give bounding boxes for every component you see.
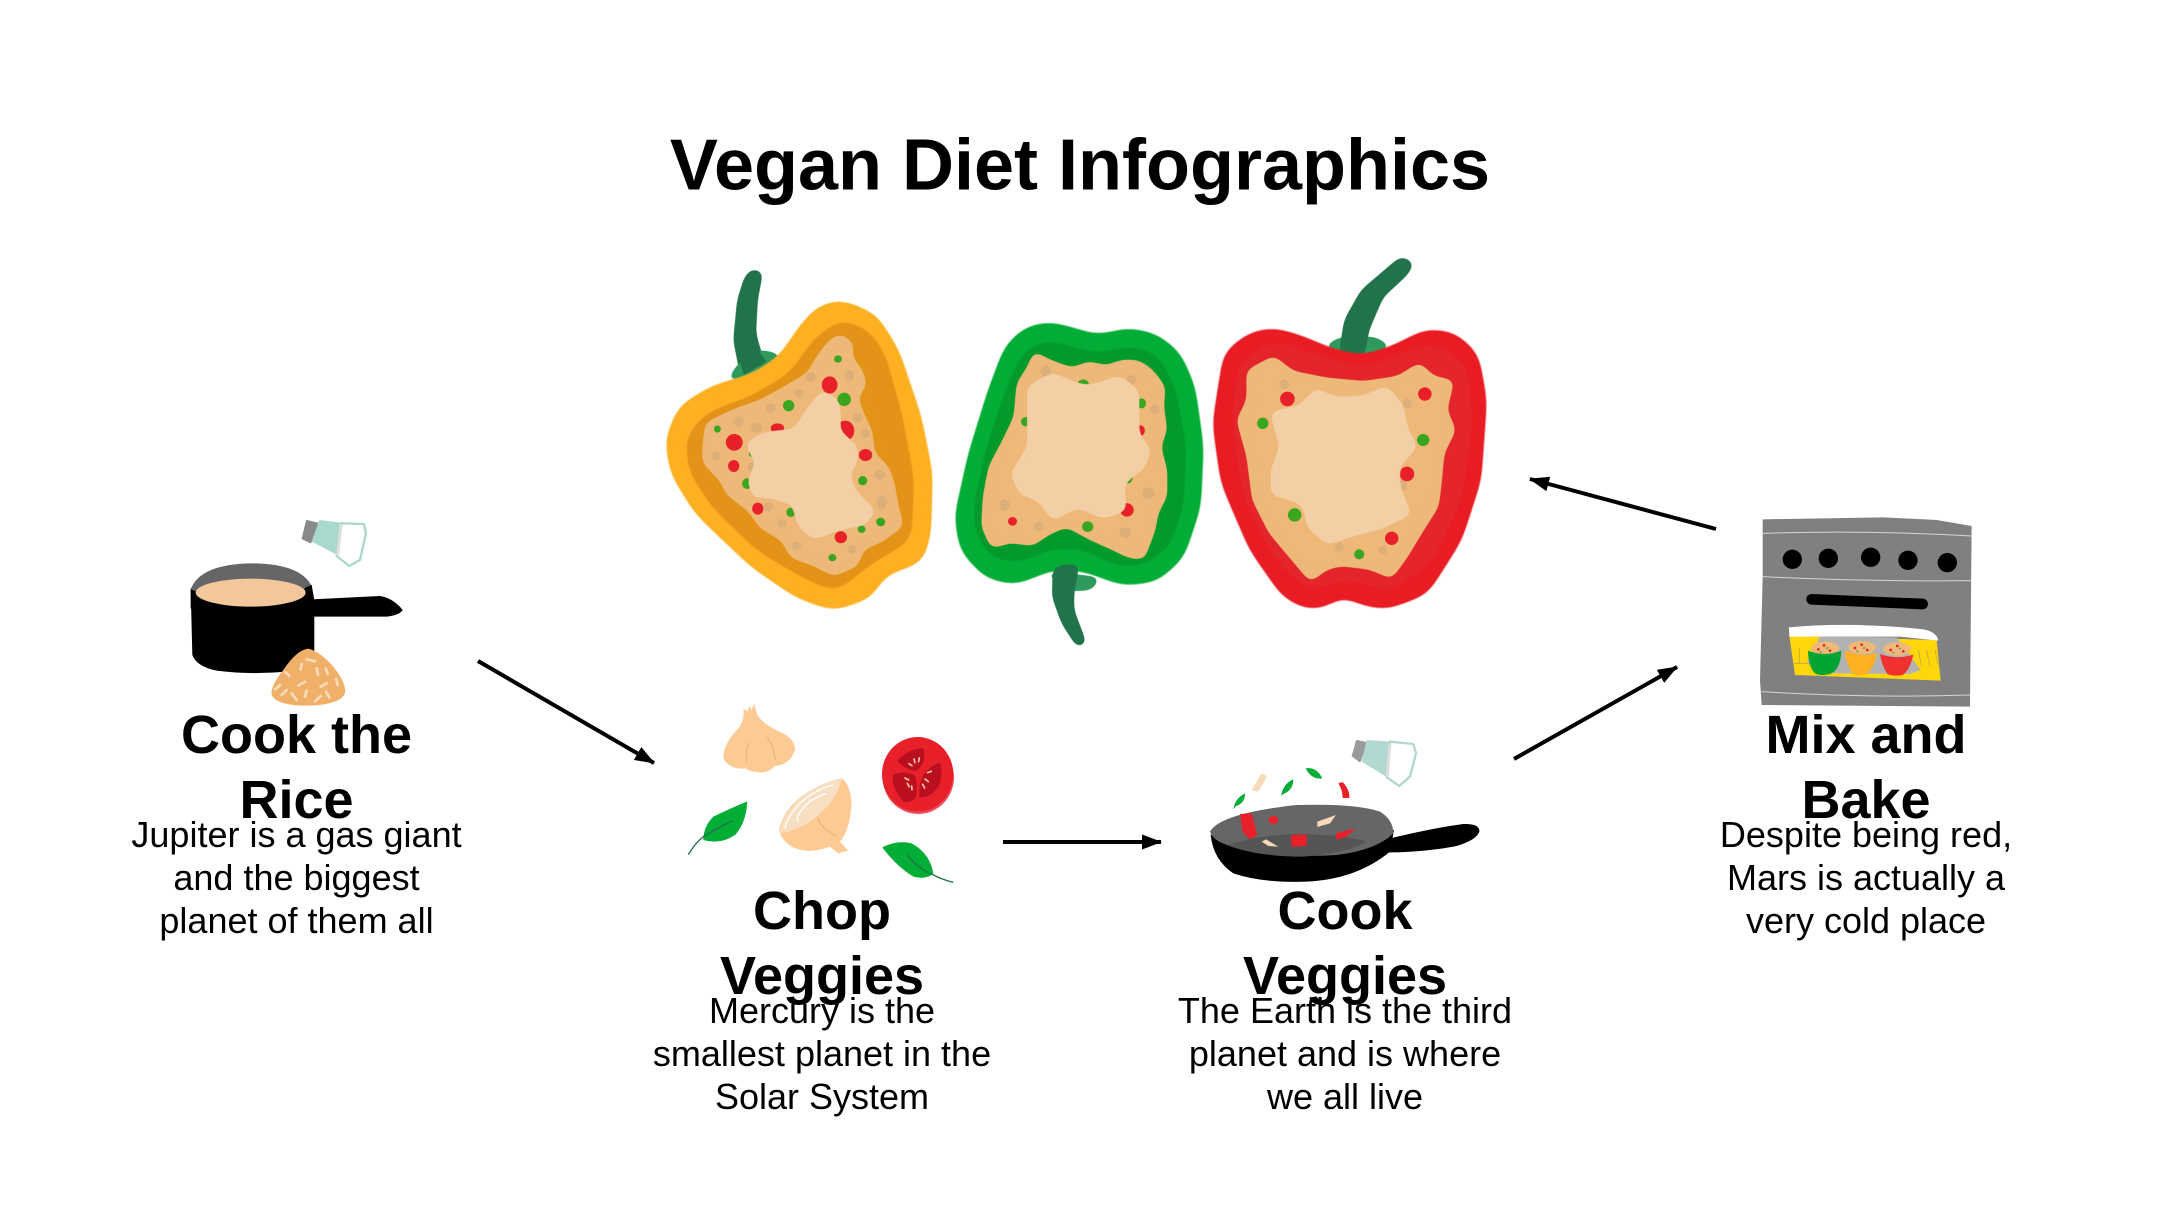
text: jupiter description: planet of them all — [159, 900, 434, 941]
icon: garlic, onion, tomato and basil — [688, 704, 954, 882]
text: mercury description: Mercury is the — [709, 990, 935, 1031]
heading: chop veggies: Chop — [753, 881, 891, 941]
heading: cook the rice: Rice — [239, 770, 354, 830]
text: mars description: very cold place — [1746, 900, 1986, 941]
icon: pot with rice and salt — [191, 520, 403, 706]
text: jupiter description: Jupiter is a gas giant — [131, 814, 462, 855]
icon: yellow pepper — [665, 269, 933, 611]
heading: mix and bake: Mix and — [1765, 705, 1967, 765]
heading: mix and bake: Bake — [1801, 770, 1931, 830]
panel: cook the rice — [131, 520, 462, 941]
text: mercury description: Solar System — [715, 1076, 929, 1117]
heading: chop veggies: Veggies — [720, 946, 924, 1006]
arrow: bake to peppers — [1530, 479, 1716, 529]
text: earth description: The Earth is the third — [1178, 990, 1512, 1031]
icon: oven with stuffed peppers — [1760, 517, 1972, 707]
heading: cook veggies: Veggies — [1243, 946, 1447, 1006]
illustration: three stuffed peppers — [665, 256, 1487, 649]
arrow: rice to chop — [478, 661, 654, 763]
icon: red pepper — [1212, 256, 1487, 610]
heading: cook the rice: Cook the — [181, 705, 412, 765]
text: earth description: we all live — [1266, 1076, 1423, 1117]
text: earth description: planet and is where — [1189, 1033, 1501, 1074]
text: mars description: Mars is actually a — [1727, 857, 2006, 898]
icon: frying pan with vegetables and salt — [1210, 740, 1479, 882]
arrow: chop to cook — [1003, 840, 1161, 844]
panel: mix and bake — [1720, 517, 2012, 941]
panel: chop veggies — [653, 704, 991, 1117]
text: mercury description: smallest planet in the — [653, 1033, 991, 1074]
text: mars description: Despite being red, — [1720, 814, 2012, 855]
arrow: cook to bake — [1514, 667, 1677, 759]
text: jupiter description: and the biggest — [173, 857, 420, 898]
icon: green pepper — [954, 321, 1204, 649]
heading: cook veggies: Cook — [1278, 881, 1413, 941]
title: Vegan Diet Infographics — [670, 126, 1490, 206]
panel: cook veggies — [1178, 740, 1512, 1117]
